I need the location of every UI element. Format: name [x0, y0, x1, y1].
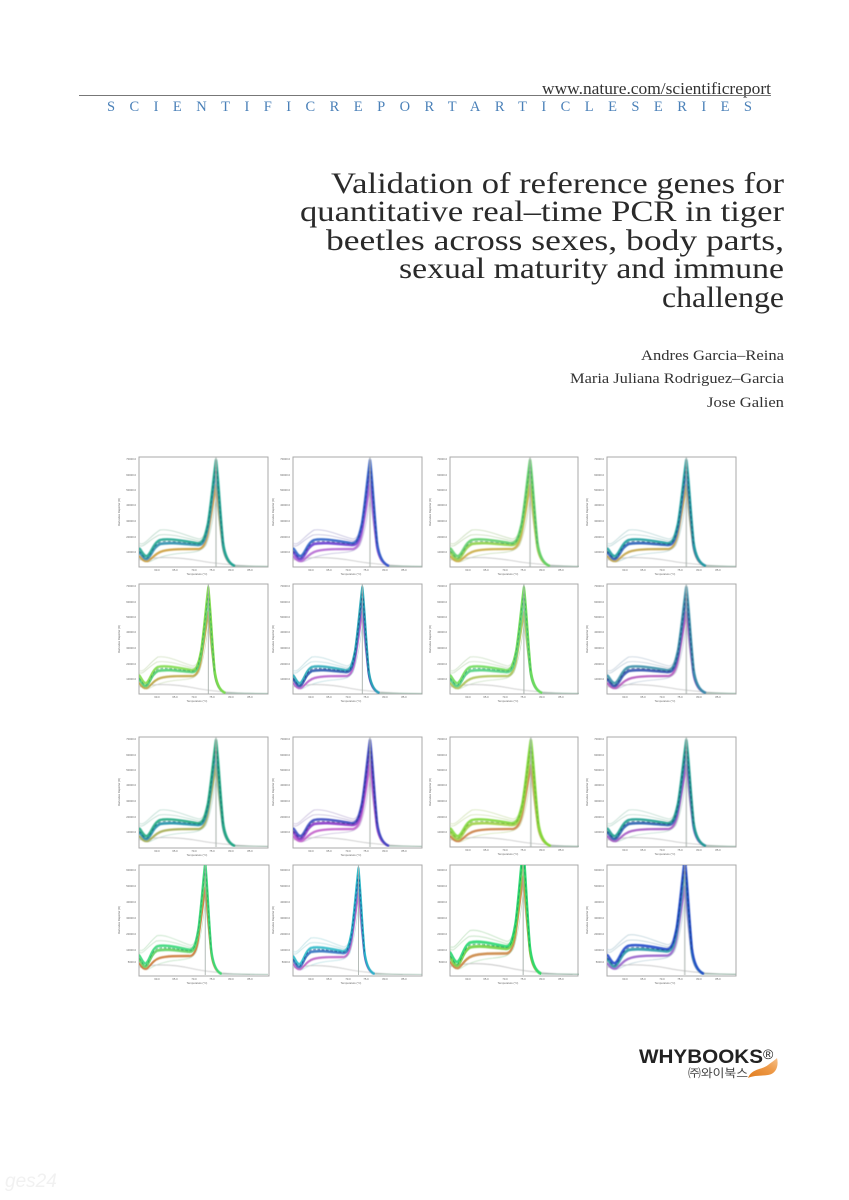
melt curve chart r4c2: 80.0 — [382, 977, 388, 981]
melt curve chart r2c2: 70.0 — [345, 695, 351, 699]
melt curve chart r2c4: 10000.0 — [594, 677, 605, 681]
melt curve chart r1c3: 10000.0 — [437, 550, 448, 554]
melt curve chart r2c3: 65.0 — [483, 695, 489, 699]
melt curve chart r1c4: 60.0 — [622, 568, 628, 572]
melt curve chart r4c2: 75.0 — [363, 977, 369, 981]
melt curve chart r1c4: 80.0 — [696, 568, 702, 572]
title: sexual maturity and immune — [399, 252, 784, 285]
melt curve chart r3c4: Derivative Reporter (R) — [585, 778, 589, 806]
melt curve chart r1c2: 75.0 — [363, 568, 369, 572]
melt curve chart r2c4: 60000.0 — [594, 600, 605, 604]
melt curve chart r4c4: 40000.0 — [594, 900, 605, 904]
melt curve chart r1c4: 75.0 — [677, 568, 683, 572]
melt curve chart r4c2: 5000.0 — [282, 960, 290, 964]
melt curve chart r4c3: 40000.0 — [437, 900, 448, 904]
melt curve chart r4c3: 30000.0 — [437, 916, 448, 920]
melt curve chart r2c3: 10000.0 — [437, 677, 448, 681]
melt curve chart r4c3 — [437, 864, 579, 984]
melt curve chart r3c3: 50000.0 — [437, 768, 448, 772]
melt curve chart r2c3: 60.0 — [465, 695, 471, 699]
melt curve chart r4c3: 20000.0 — [437, 932, 448, 936]
melt curve chart r2c4: 85.0 — [715, 695, 721, 699]
melt curve chart r1c1: 50000.0 — [126, 488, 137, 492]
melt curve chart r4c4: 60.0 — [622, 977, 628, 981]
melt curve chart r4c2: Temperature (°C) — [341, 981, 361, 985]
melt curve chart r3c1: 80.0 — [228, 849, 234, 853]
melt curve chart r3c3: Derivative Reporter (R) — [428, 778, 432, 806]
melt curve chart r4c1: 70.0 — [191, 977, 197, 981]
melt curve chart r1c4: 70.0 — [659, 568, 665, 572]
melt curve chart r3c2: 60000.0 — [280, 753, 291, 757]
melt curve chart r1c1: 75.0 — [209, 568, 215, 572]
melt curve chart r3c2 — [272, 736, 422, 856]
melt curve chart r1c2: 80.0 — [382, 568, 388, 572]
melt curve chart r2c2 — [272, 584, 422, 702]
melt curve chart r3c2: 10000.0 — [280, 830, 291, 834]
melt curve chart r3c4: 20000.0 — [594, 815, 605, 819]
melt curve chart r2c4: 70.0 — [659, 695, 665, 699]
melt curve chart r4c1: 75.0 — [209, 977, 215, 981]
melt curve chart r3c3: 30000.0 — [437, 799, 448, 803]
melt curve chart r4c2: 50000.0 — [280, 884, 291, 888]
melt curve chart r2c1: 70.0 — [191, 695, 197, 699]
melt curve chart r2c4: 60.0 — [622, 695, 628, 699]
melt curve chart r2c2: 40000.0 — [280, 630, 291, 634]
melt curve chart r1c2: Temperature (°C) — [341, 572, 361, 576]
melt curve chart r4c2: 20000.0 — [280, 932, 291, 936]
melt curve chart r2c1: 50000.0 — [126, 615, 137, 619]
melt curve chart r4c4: Derivative Reporter (R) — [585, 906, 589, 934]
melt curve chart r4c4: 50000.0 — [594, 884, 605, 888]
melt curve chart r3c2: Temperature (°C) — [341, 853, 361, 857]
melt curve chart r1c2: 20000.0 — [280, 535, 291, 539]
publisher logo: ® — [763, 1046, 774, 1062]
melt curve chart r4c1: 85.0 — [247, 977, 253, 981]
melt curve chart r4c1: 5000.0 — [128, 960, 136, 964]
melt curve chart r3c1: 60000.0 — [126, 753, 137, 757]
melt curve chart r4c1: 10000.0 — [126, 948, 137, 952]
melt curve chart r4c2: Derivative Reporter (R) — [271, 906, 275, 934]
melt curve chart r1c2: 85.0 — [401, 568, 407, 572]
melt curve chart r1c1 — [118, 456, 268, 576]
melt curve chart r1c3: 85.0 — [558, 568, 564, 572]
melt curve chart r2c3: Derivative Reporter (R) — [428, 625, 432, 653]
melt curve chart r4c3: 85.0 — [558, 977, 564, 981]
melt curve chart r1c1: Temperature (°C) — [187, 572, 207, 576]
melt curve chart r4c2: 40000.0 — [280, 900, 291, 904]
melt curve chart r1c3: Derivative Reporter (R) — [428, 498, 432, 526]
melt curve chart r3c3: 10000.0 — [437, 830, 448, 834]
melt curve chart r2c2: 60000.0 — [280, 600, 291, 604]
melt curve chart r2c3: 30000.0 — [437, 646, 448, 650]
melt curve chart r4c4: 5000.0 — [596, 960, 604, 964]
melt curve chart r3c3: 65.0 — [483, 848, 489, 852]
melt curve chart r2c4: 20000.0 — [594, 662, 605, 666]
watermark: ges24 — [5, 1171, 57, 1192]
melt curve chart r1c4: Temperature (°C) — [655, 572, 675, 576]
melt curve chart r3c1: 70.0 — [191, 849, 197, 853]
melt curve chart r1c4: 65.0 — [640, 568, 646, 572]
melt curve chart r4c1: 60.0 — [154, 977, 160, 981]
melt curve chart r4c4: 60000.0 — [594, 868, 605, 872]
melt curve chart r3c4: 50000.0 — [594, 768, 605, 772]
melt curve chart r2c4: 70000.0 — [594, 584, 605, 588]
melt curve chart r3c4: Temperature (°C) — [655, 852, 675, 856]
title: quantitative real–time PCR in tiger — [300, 195, 784, 228]
melt curve chart r3c3 — [429, 736, 579, 856]
melt curve chart r3c1: 60.0 — [154, 849, 160, 853]
melt curve chart r4c4: 65.0 — [640, 977, 646, 981]
melt curve chart r1c1: 10000.0 — [126, 550, 137, 554]
melt curve chart r2c2: 65.0 — [326, 695, 332, 699]
melt curve chart r4c2: 30000.0 — [280, 916, 291, 920]
melt curve chart r3c4: 85.0 — [715, 848, 721, 852]
authors: Andres Garcia–Reina — [641, 348, 784, 364]
melt curve chart r3c4 — [586, 736, 736, 856]
melt curve chart r4c1: 20000.0 — [126, 932, 137, 936]
title: beetles across sexes, body parts, — [326, 224, 784, 257]
melt curve chart r4c1: Derivative Reporter (R) — [117, 906, 121, 934]
melt curve chart r2c4: Temperature (°C) — [655, 699, 675, 703]
header rule — [79, 95, 771, 96]
melt curve chart r1c1: 30000.0 — [126, 519, 137, 523]
melt curve chart r3c2: 85.0 — [401, 849, 407, 853]
melt curve chart r1c3: 20000.0 — [437, 535, 448, 539]
melt curve chart r1c3: 70.0 — [502, 568, 508, 572]
melt curve chart r1c3: 80.0 — [539, 568, 545, 572]
melt curve chart r1c2: 70000.0 — [280, 457, 291, 461]
melt curve chart r2c3: 85.0 — [558, 695, 564, 699]
melt curve chart r3c2: 40000.0 — [280, 783, 291, 787]
melt curve chart r3c4: 70.0 — [659, 848, 665, 852]
melt curve chart r2c2: Derivative Reporter (R) — [271, 625, 275, 653]
melt curve chart r4c2: 70.0 — [345, 977, 351, 981]
melt curve chart r2c1: 80.0 — [228, 695, 234, 699]
melt curve chart r4c1: Temperature (°C) — [187, 981, 207, 985]
melt curve chart r3c3: 40000.0 — [437, 783, 448, 787]
melt curve chart r2c2: 80.0 — [382, 695, 388, 699]
melt curve chart r1c2: 40000.0 — [280, 503, 291, 507]
melt curve chart r1c2: 70.0 — [345, 568, 351, 572]
melt curve chart r1c3: 30000.0 — [437, 519, 448, 523]
melt curve chart r3c1: 65.0 — [172, 849, 178, 853]
melt curve chart r1c4: 70000.0 — [594, 457, 605, 461]
melt curve chart r2c3: 40000.0 — [437, 630, 448, 634]
melt curve chart r3c3: 70.0 — [502, 848, 508, 852]
melt curve chart r2c1: 30000.0 — [126, 646, 137, 650]
melt curve chart r2c3: 20000.0 — [437, 662, 448, 666]
melt curve chart r1c4: 30000.0 — [594, 519, 605, 523]
melt curve chart r3c4: 60.0 — [622, 848, 628, 852]
melt curve chart r1c1: 40000.0 — [126, 503, 137, 507]
melt curve chart r3c1: 10000.0 — [126, 830, 137, 834]
melt curve chart r3c4: 60000.0 — [594, 753, 605, 757]
melt curve chart r4c3: 70.0 — [502, 977, 508, 981]
melt curve chart r2c2: 30000.0 — [280, 646, 291, 650]
melt curve chart r2c2: 60.0 — [308, 695, 314, 699]
authors: Jose Galien — [707, 395, 785, 411]
melt curve chart r2c3 — [429, 584, 579, 702]
melt curve chart r4c3: 60000.0 — [437, 868, 448, 872]
melt curve chart r3c1: 70000.0 — [126, 737, 137, 741]
melt curve chart r3c1: 20000.0 — [126, 815, 137, 819]
melt curve chart r1c2: 50000.0 — [280, 488, 291, 492]
melt curve chart r4c1 — [118, 864, 270, 984]
melt curve chart r2c2: 20000.0 — [280, 662, 291, 666]
melt curve chart r1c3: 60.0 — [465, 568, 471, 572]
melt curve chart r3c4: 40000.0 — [594, 783, 605, 787]
melt curve chart r3c1: 40000.0 — [126, 783, 137, 787]
melt curve chart r3c2: 60.0 — [308, 849, 314, 853]
melt curve chart r3c1: 75.0 — [209, 849, 215, 853]
melt curve chart r3c2: 65.0 — [326, 849, 332, 853]
melt curve chart r4c2: 85.0 — [401, 977, 407, 981]
melt curve chart r1c1: 70.0 — [191, 568, 197, 572]
melt curve chart r4c3: 60.0 — [465, 977, 471, 981]
melt curve chart r2c3: 70.0 — [502, 695, 508, 699]
melt curve chart r4c3: Temperature (°C) — [498, 981, 518, 985]
melt curve chart r1c3: 75.0 — [520, 568, 526, 572]
melt curve chart r3c4: 70000.0 — [594, 737, 605, 741]
melt curve chart r3c3: 70000.0 — [437, 737, 448, 741]
melt curve chart r3c1: Derivative Reporter (R) — [117, 778, 121, 806]
melt curve chart r3c3: 60.0 — [465, 848, 471, 852]
melt curve chart r1c3 — [429, 456, 579, 576]
melt curve chart r4c4: 75.0 — [677, 977, 683, 981]
melt curve chart r4c4: 70.0 — [659, 977, 665, 981]
melt curve chart r2c2: Temperature (°C) — [341, 699, 361, 703]
melt curve chart r2c4: 40000.0 — [594, 630, 605, 634]
melt curve chart r1c3: 70000.0 — [437, 457, 448, 461]
melt curve chart r2c1: Temperature (°C) — [187, 699, 207, 703]
melt curve chart r3c1: 85.0 — [247, 849, 253, 853]
melt curve chart r4c4: 20000.0 — [594, 932, 605, 936]
melt curve chart r2c4: 50000.0 — [594, 615, 605, 619]
melt curve chart r1c4 — [586, 456, 736, 576]
melt curve chart r1c2: 60000.0 — [280, 473, 291, 477]
melt curve chart r4c3: 5000.0 — [439, 960, 447, 964]
melt curve chart r1c2 — [272, 456, 422, 576]
melt curve chart r2c1: 60000.0 — [126, 600, 137, 604]
melt curve chart r4c4: 80.0 — [696, 977, 702, 981]
melt curve chart r4c3: 75.0 — [520, 977, 526, 981]
melt curve chart r3c2: 30000.0 — [280, 799, 291, 803]
melt curve chart r1c1: 60000.0 — [126, 473, 137, 477]
melt curve chart r2c2: 10000.0 — [280, 677, 291, 681]
melt curve chart r4c2: 10000.0 — [280, 948, 291, 952]
melt curve chart r4c3: 50000.0 — [437, 884, 448, 888]
melt curve chart r2c2: 85.0 — [401, 695, 407, 699]
melt curve chart r4c1: 80.0 — [228, 977, 234, 981]
melt curve chart r4c1: 65.0 — [172, 977, 178, 981]
melt curve chart r4c4: 85.0 — [715, 977, 721, 981]
melt curve chart r2c4: 75.0 — [677, 695, 683, 699]
publisher logo: WHYBOOKS — [639, 1047, 763, 1068]
melt curve chart r3c3: 60000.0 — [437, 753, 448, 757]
melt curve chart r1c2: 30000.0 — [280, 519, 291, 523]
melt curve chart r2c4: 80.0 — [696, 695, 702, 699]
melt curve chart r4c4 — [586, 864, 736, 984]
melt curve chart r3c2: 50000.0 — [280, 768, 291, 772]
melt curve chart r4c3: 80.0 — [539, 977, 545, 981]
melt curve chart r1c1: 85.0 — [247, 568, 253, 572]
melt curve chart r2c3: 70000.0 — [437, 584, 448, 588]
melt curve chart r1c1: 70000.0 — [126, 457, 137, 461]
melt curve chart r4c4: Temperature (°C) — [655, 981, 675, 985]
melt curve chart r2c2: 70000.0 — [280, 584, 291, 588]
melt curve chart r2c4: 30000.0 — [594, 646, 605, 650]
website url: www.nature.com/scientificreport — [542, 79, 771, 98]
melt curve chart r2c4: 65.0 — [640, 695, 646, 699]
melt curve chart r1c4: 10000.0 — [594, 550, 605, 554]
title: Validation of reference genes for — [331, 167, 784, 200]
melt curve chart r2c1: 75.0 — [209, 695, 215, 699]
melt curve chart r2c3: 80.0 — [539, 695, 545, 699]
melt curve chart r4c1: 40000.0 — [126, 900, 137, 904]
melt curve chart r2c1 — [118, 584, 268, 702]
publisher logo — [639, 1046, 778, 1080]
melt curve chart r2c3: Temperature (°C) — [498, 699, 518, 703]
melt curve chart r1c1: Derivative Reporter (R) — [117, 498, 121, 526]
melt curve chart r2c2: 75.0 — [363, 695, 369, 699]
melt curve chart r1c1: 65.0 — [172, 568, 178, 572]
melt curve chart r1c4: 40000.0 — [594, 503, 605, 507]
melt curve chart r3c3: 20000.0 — [437, 815, 448, 819]
melt curve chart r3c4: 30000.0 — [594, 799, 605, 803]
melt curve chart r4c1: 30000.0 — [126, 916, 137, 920]
melt curve chart r3c2: 80.0 — [382, 849, 388, 853]
melt curve chart r3c1: 50000.0 — [126, 768, 137, 772]
melt curve chart r2c4: Derivative Reporter (R) — [585, 625, 589, 653]
melt curve chart r4c3: 10000.0 — [437, 948, 448, 952]
melt curve chart r3c2: 20000.0 — [280, 815, 291, 819]
melt curve chart r1c2: 60.0 — [308, 568, 314, 572]
melt curve chart r2c1: 20000.0 — [126, 662, 137, 666]
melt curve chart r1c3: 65.0 — [483, 568, 489, 572]
melt curve chart r4c2 — [271, 865, 438, 985]
melt curve chart r2c1: 70000.0 — [126, 584, 137, 588]
melt curve chart r3c4: 10000.0 — [594, 830, 605, 834]
title: challenge — [662, 281, 784, 314]
melt curve chart r3c1: Temperature (°C) — [187, 853, 207, 857]
melt curve chart r1c4: Derivative Reporter (R) — [585, 498, 589, 526]
melt curve chart r1c4: 20000.0 — [594, 535, 605, 539]
melt curve chart r3c3: 80.0 — [539, 848, 545, 852]
melt curve chart r4c2: 65.0 — [326, 977, 332, 981]
melt curve chart r2c1: 40000.0 — [126, 630, 137, 634]
melt curve chart r3c3: 85.0 — [558, 848, 564, 852]
melt curve chart r1c3: 60000.0 — [437, 473, 448, 477]
melt curve chart r1c2: 65.0 — [326, 568, 332, 572]
title — [300, 167, 784, 314]
melt curve chart r1c1: 20000.0 — [126, 535, 137, 539]
melt curve chart r4c3: 65.0 — [483, 977, 489, 981]
melt curve chart r3c2: 70000.0 — [280, 737, 291, 741]
authors: Maria Juliana Rodriguez–Garcia — [570, 371, 784, 387]
publisher logo: ㈜와이북스 — [688, 1067, 748, 1080]
melt curve chart r3c3: Temperature (°C) — [498, 852, 518, 856]
melt curve chart r4c4: 30000.0 — [594, 916, 605, 920]
melt curve chart r2c3: 75.0 — [520, 695, 526, 699]
melt curve chart r1c4: 85.0 — [715, 568, 721, 572]
melt curve chart r2c1: 60.0 — [154, 695, 160, 699]
melt curve chart r2c2: 50000.0 — [280, 615, 291, 619]
melt curve chart r2c1: 10000.0 — [126, 677, 137, 681]
melt curve chart r1c3: Temperature (°C) — [498, 572, 518, 576]
melt curve chart r1c4: 60000.0 — [594, 473, 605, 477]
melt curve chart r1c2: Derivative Reporter (R) — [271, 498, 275, 526]
melt curve chart r3c1: 30000.0 — [126, 799, 137, 803]
melt curve chart r4c1: 60000.0 — [126, 868, 137, 872]
melt curve chart r3c2: Derivative Reporter (R) — [271, 778, 275, 806]
melt curve chart r2c4 — [586, 584, 736, 702]
melt curve chart r1c1: 60.0 — [154, 568, 160, 572]
authors — [570, 348, 785, 411]
melt curve chart r1c3: 40000.0 — [437, 503, 448, 507]
melt curve chart r3c4: 75.0 — [677, 848, 683, 852]
melt curve chart r3c4: 80.0 — [696, 848, 702, 852]
melt curve chart r3c2: 75.0 — [363, 849, 369, 853]
melt curve chart r3c4: 65.0 — [640, 848, 646, 852]
melt curve chart r2c1: 85.0 — [247, 695, 253, 699]
melt curve chart r2c1: Derivative Reporter (R) — [117, 625, 121, 653]
melt curve chart r3c1 — [118, 736, 268, 856]
melt curve chart r1c3: 50000.0 — [437, 488, 448, 492]
melt curve chart r4c2: 60.0 — [308, 977, 314, 981]
melt curve chart r1c4: 50000.0 — [594, 488, 605, 492]
melt curve chart r3c2: 70.0 — [345, 849, 351, 853]
melt curve chart r1c2: 10000.0 — [280, 550, 291, 554]
melt curve chart r4c4: 10000.0 — [594, 948, 605, 952]
series label: SCIENTIFICREPORTARTICLESERIES — [107, 99, 752, 115]
melt curve chart r3c3: 75.0 — [520, 848, 526, 852]
melt curve chart r2c1: 65.0 — [172, 695, 178, 699]
melt curve chart r4c2: 60000.0 — [280, 868, 291, 872]
melt curve chart r4c1: 50000.0 — [126, 884, 137, 888]
melt curve chart r1c1: 80.0 — [228, 568, 234, 572]
melt curve chart r2c3: 60000.0 — [437, 600, 448, 604]
melt curve chart r2c3: 50000.0 — [437, 615, 448, 619]
